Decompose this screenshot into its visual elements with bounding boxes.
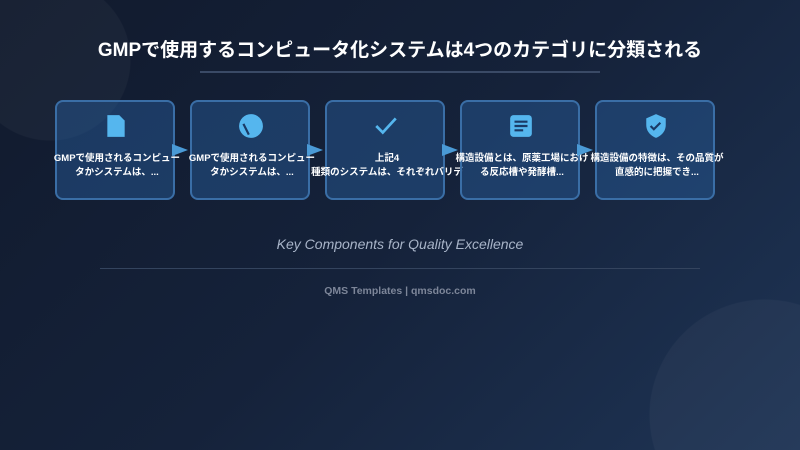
card text 1 — [54, 152, 180, 178]
icon: document — [107, 115, 125, 137]
arrow 3 — [442, 144, 458, 156]
icon: circle — [239, 114, 263, 138]
subtitle: Key Components for Quality Excellence — [277, 236, 523, 252]
card text 1: タかシステムは、... — [75, 167, 159, 178]
icon: check — [375, 118, 397, 134]
card 2 — [190, 100, 310, 200]
card text 3 — [311, 152, 463, 178]
card text 3: 上記4 — [375, 153, 399, 164]
card 5 — [595, 100, 715, 200]
card text 2: タかシステムは、... — [210, 167, 294, 178]
card text 4 — [455, 152, 588, 178]
card text 4: 構造設備とは、原薬工場におけ — [455, 153, 588, 164]
icon: list — [510, 115, 532, 137]
card text 1: GMPで使用されるコンピュー — [54, 153, 180, 164]
card 1 — [55, 100, 175, 200]
card text 5: 構造設備の特徴は、その品質が — [590, 153, 724, 164]
card text 5 — [590, 152, 724, 178]
card 4 — [460, 100, 580, 200]
icon: shield — [646, 114, 666, 138]
arrow 4 — [577, 144, 593, 156]
arrow 1 — [172, 144, 188, 156]
card text 3: 種類のシステムは、それぞれバリデ — [311, 167, 463, 178]
card text 2: GMPで使用されるコンピュー — [189, 153, 315, 164]
card text 2 — [189, 152, 315, 178]
arrow 2 — [307, 144, 323, 156]
footer: QMS Templates | qmsdoc.com — [324, 285, 476, 297]
card 3 — [325, 100, 445, 200]
card text 5: 直感的に把握でき... — [615, 167, 699, 178]
title: GMPで使用するコンピュータ化システムは4つのカテゴリに分類される — [98, 40, 702, 61]
card text 4: る反応槽や発酵槽... — [480, 167, 564, 178]
